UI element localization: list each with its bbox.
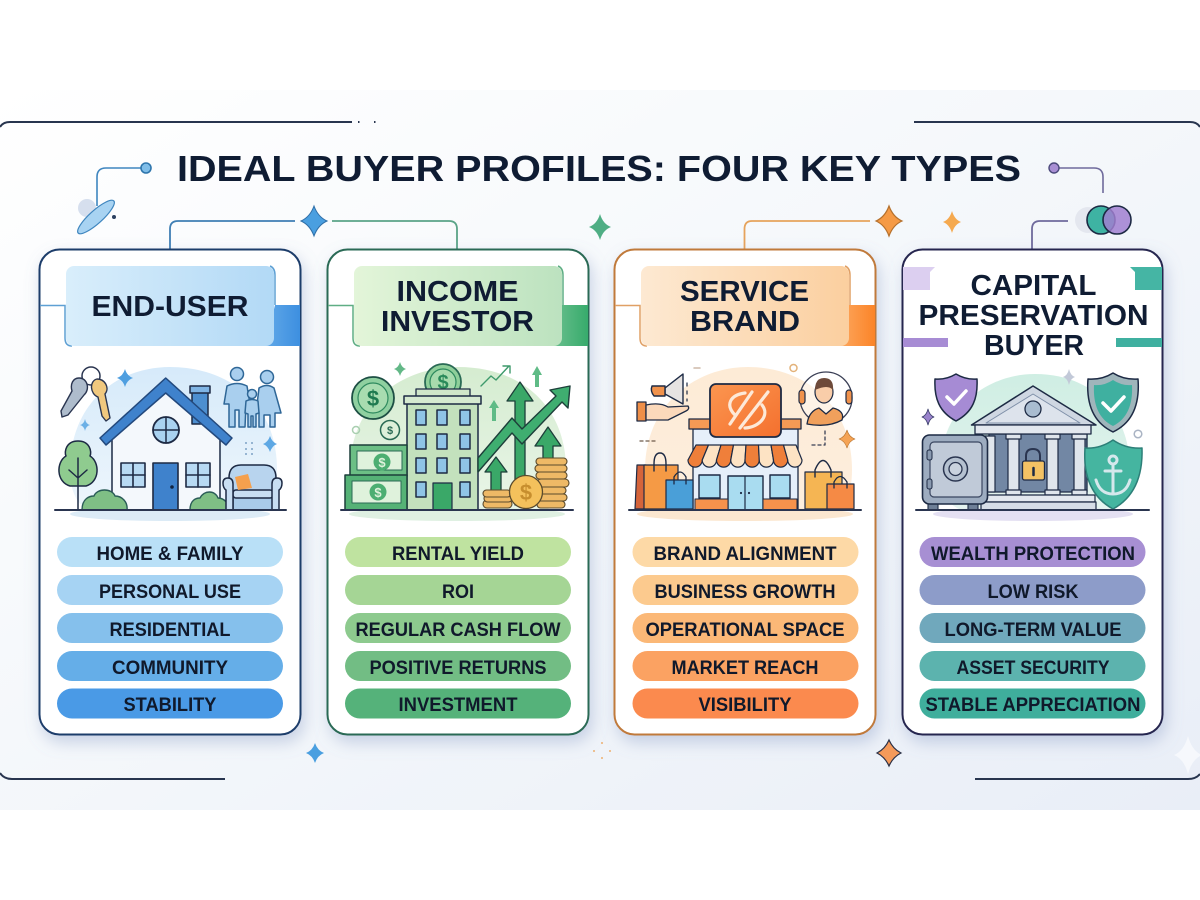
connector: capital preservation (1032, 221, 1068, 249)
panel: service brand (614, 250, 876, 734)
sparkle: small orange (943, 211, 961, 233)
attribute pills: MARKET REACH (672, 657, 818, 679)
panel: end-user (40, 250, 300, 734)
attribute pills: BUSINESS GROWTH (654, 581, 836, 603)
attribute pills: INVESTMENT (398, 694, 518, 716)
card frame (328, 250, 588, 734)
attribute pills: RESIDENTIAL (110, 619, 231, 641)
attribute pills: VISIBILITY (698, 694, 792, 716)
panel: income investor (328, 250, 588, 734)
title: IDEAL BUYER PROFILES: FOUR KEY TYPES (177, 148, 1021, 189)
attribute pills: LOW RISK (988, 581, 1078, 603)
attribute pills: STABILITY (124, 694, 216, 716)
heading (918, 270, 1148, 362)
connector: service brand (744, 206, 902, 249)
connector: end-user to income investor (170, 206, 457, 249)
attribute pills: RENTAL YIELD (392, 543, 524, 565)
illustration: building, cash, growth: $ (378, 455, 386, 470)
background panel (0, 90, 1200, 810)
illustration: building, cash, growth: $ (387, 425, 393, 437)
header band: INVESTOR (381, 306, 534, 338)
card frame (614, 250, 876, 734)
illustration: bank, safe, shields (916, 369, 1149, 521)
card frame (40, 250, 300, 734)
illustration: building, cash, growth: $ (367, 386, 379, 411)
outer frame lines (0, 122, 1200, 779)
attribute pills (345, 537, 571, 718)
decoration: top-left node and leaf (74, 163, 151, 238)
attribute pills: COMMUNITY (112, 657, 228, 679)
attribute pills: REGULAR CASH FLOW (356, 619, 561, 641)
heading: CAPITAL (970, 270, 1096, 302)
header band (40, 266, 300, 346)
illustration: building, cash, growth: $ (437, 372, 449, 394)
attribute pills: WEALTH PROTECTION (931, 543, 1135, 565)
header band (328, 266, 588, 346)
header decoration (903, 267, 1162, 347)
attribute pills (57, 537, 283, 718)
header band: END-USER (92, 291, 249, 323)
sparkle: green (589, 214, 611, 240)
sparkle: bottom orange dots (593, 742, 611, 759)
header band: SERVICE (680, 276, 809, 308)
illustration: house, family, keys (55, 367, 286, 521)
heading: BUYER (984, 330, 1084, 362)
attribute pills (632, 537, 858, 718)
illustration: building, cash, growth: $ (520, 480, 532, 505)
attribute pills: ASSET SECURITY (956, 657, 1110, 679)
illustration: building, cash, growth: $ (374, 485, 382, 500)
attribute pills (920, 537, 1146, 718)
header band (615, 266, 875, 346)
sparkle: bottom orange (877, 740, 901, 766)
attribute pills: BRAND ALIGNMENT (654, 543, 837, 565)
attribute pills: POSITIVE RETURNS (370, 657, 546, 679)
attribute pills: LONG-TERM VALUE (944, 619, 1122, 641)
sparkle: faint white (1174, 736, 1200, 774)
sparkle: bottom blue (306, 743, 324, 763)
attribute pills: PERSONAL USE (99, 581, 241, 603)
attribute pills: STABLE APPRECIATION (926, 694, 1140, 716)
decoration: top-right node and overlapping circles (1049, 163, 1131, 234)
attribute pills: OPERATIONAL SPACE (646, 619, 844, 641)
header band: INCOME (396, 276, 518, 308)
attribute pills: HOME & FAMILY (96, 543, 244, 565)
header band: BRAND (690, 306, 800, 338)
panel: capital preservation buyer (902, 250, 1162, 734)
card frame (902, 250, 1162, 734)
illustration: storefront, bags, agent (629, 364, 861, 521)
heading: PRESERVATION (918, 300, 1148, 332)
illustration: building, cash, growth (341, 362, 573, 521)
attribute pills: ROI (442, 581, 474, 603)
